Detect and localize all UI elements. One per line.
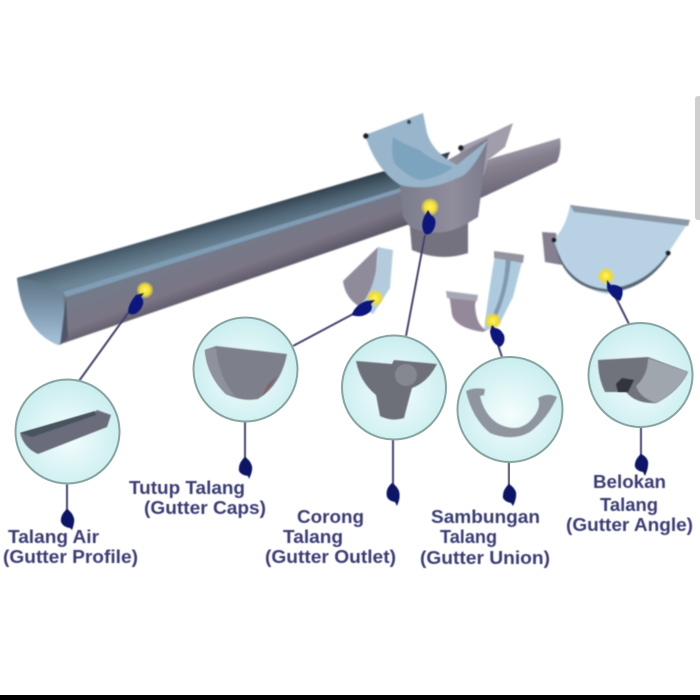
label: Corong Talang (Gutter Outlet) bbox=[265, 507, 396, 567]
label: Tutup Talang (Gutter Caps) bbox=[129, 478, 266, 518]
connector line: gutter caps bbox=[245, 313, 355, 460]
gutter union bbox=[446, 251, 524, 332]
navy drop pointers under circles bbox=[61, 454, 648, 530]
label: Sambungan Talang (Gutter Union): (Gutter Union) bbox=[420, 548, 550, 568]
connector line: gutter outlet bbox=[393, 235, 425, 488]
gutter outlet bbox=[363, 113, 513, 257]
grey side tab bbox=[695, 96, 700, 220]
label: Tutup Talang (Gutter Caps): (Gutter Caps) bbox=[144, 498, 266, 518]
label: Talang Air (Gutter Profile): Talang Air bbox=[8, 527, 99, 547]
main gutter profile bbox=[17, 138, 561, 345]
label: Corong Talang (Gutter Outlet): Corong bbox=[297, 507, 364, 527]
label: Belokan Talang (Gutter Angle): Belokan bbox=[593, 472, 666, 492]
navy pointer hands on parts bbox=[128, 210, 623, 347]
label: Corong Talang (Gutter Outlet): (Gutter Outlet) bbox=[265, 547, 396, 567]
label: Sambungan Talang (Gutter Union) bbox=[420, 507, 550, 568]
label: Sambungan Talang (Gutter Union): Sambungan bbox=[431, 507, 540, 527]
circle: gutter profile bbox=[16, 380, 120, 484]
connector line: gutter profile bbox=[67, 313, 128, 512]
label: Talang Air (Gutter Profile) bbox=[3, 527, 138, 567]
label: Talang Air (Gutter Profile): (Gutter Profile) bbox=[3, 547, 138, 567]
label: Belokan Talang (Gutter Angle): (Gutter Angle) bbox=[566, 515, 693, 535]
yellow marker dots bbox=[136, 198, 614, 330]
circle: gutter outlet bbox=[342, 336, 446, 440]
black bottom strip bbox=[0, 695, 700, 700]
label: Tutup Talang (Gutter Caps): Tutup Talang bbox=[129, 478, 245, 498]
label: Corong Talang (Gutter Outlet): Talang bbox=[283, 527, 343, 547]
connector line: gutter union bbox=[498, 345, 509, 488]
connector line: gutter angle bbox=[616, 298, 641, 458]
gutter angle bbox=[542, 205, 690, 294]
circle: gutter caps bbox=[194, 318, 298, 422]
circle: gutter union bbox=[458, 357, 562, 462]
label: Belokan Talang (Gutter Angle): Talang bbox=[600, 495, 658, 515]
label: Sambungan Talang (Gutter Union): Talang bbox=[440, 527, 497, 547]
label: Belokan Talang (Gutter Angle) bbox=[566, 472, 693, 535]
gutter cap bbox=[343, 247, 393, 314]
circle: gutter angle bbox=[588, 323, 692, 427]
